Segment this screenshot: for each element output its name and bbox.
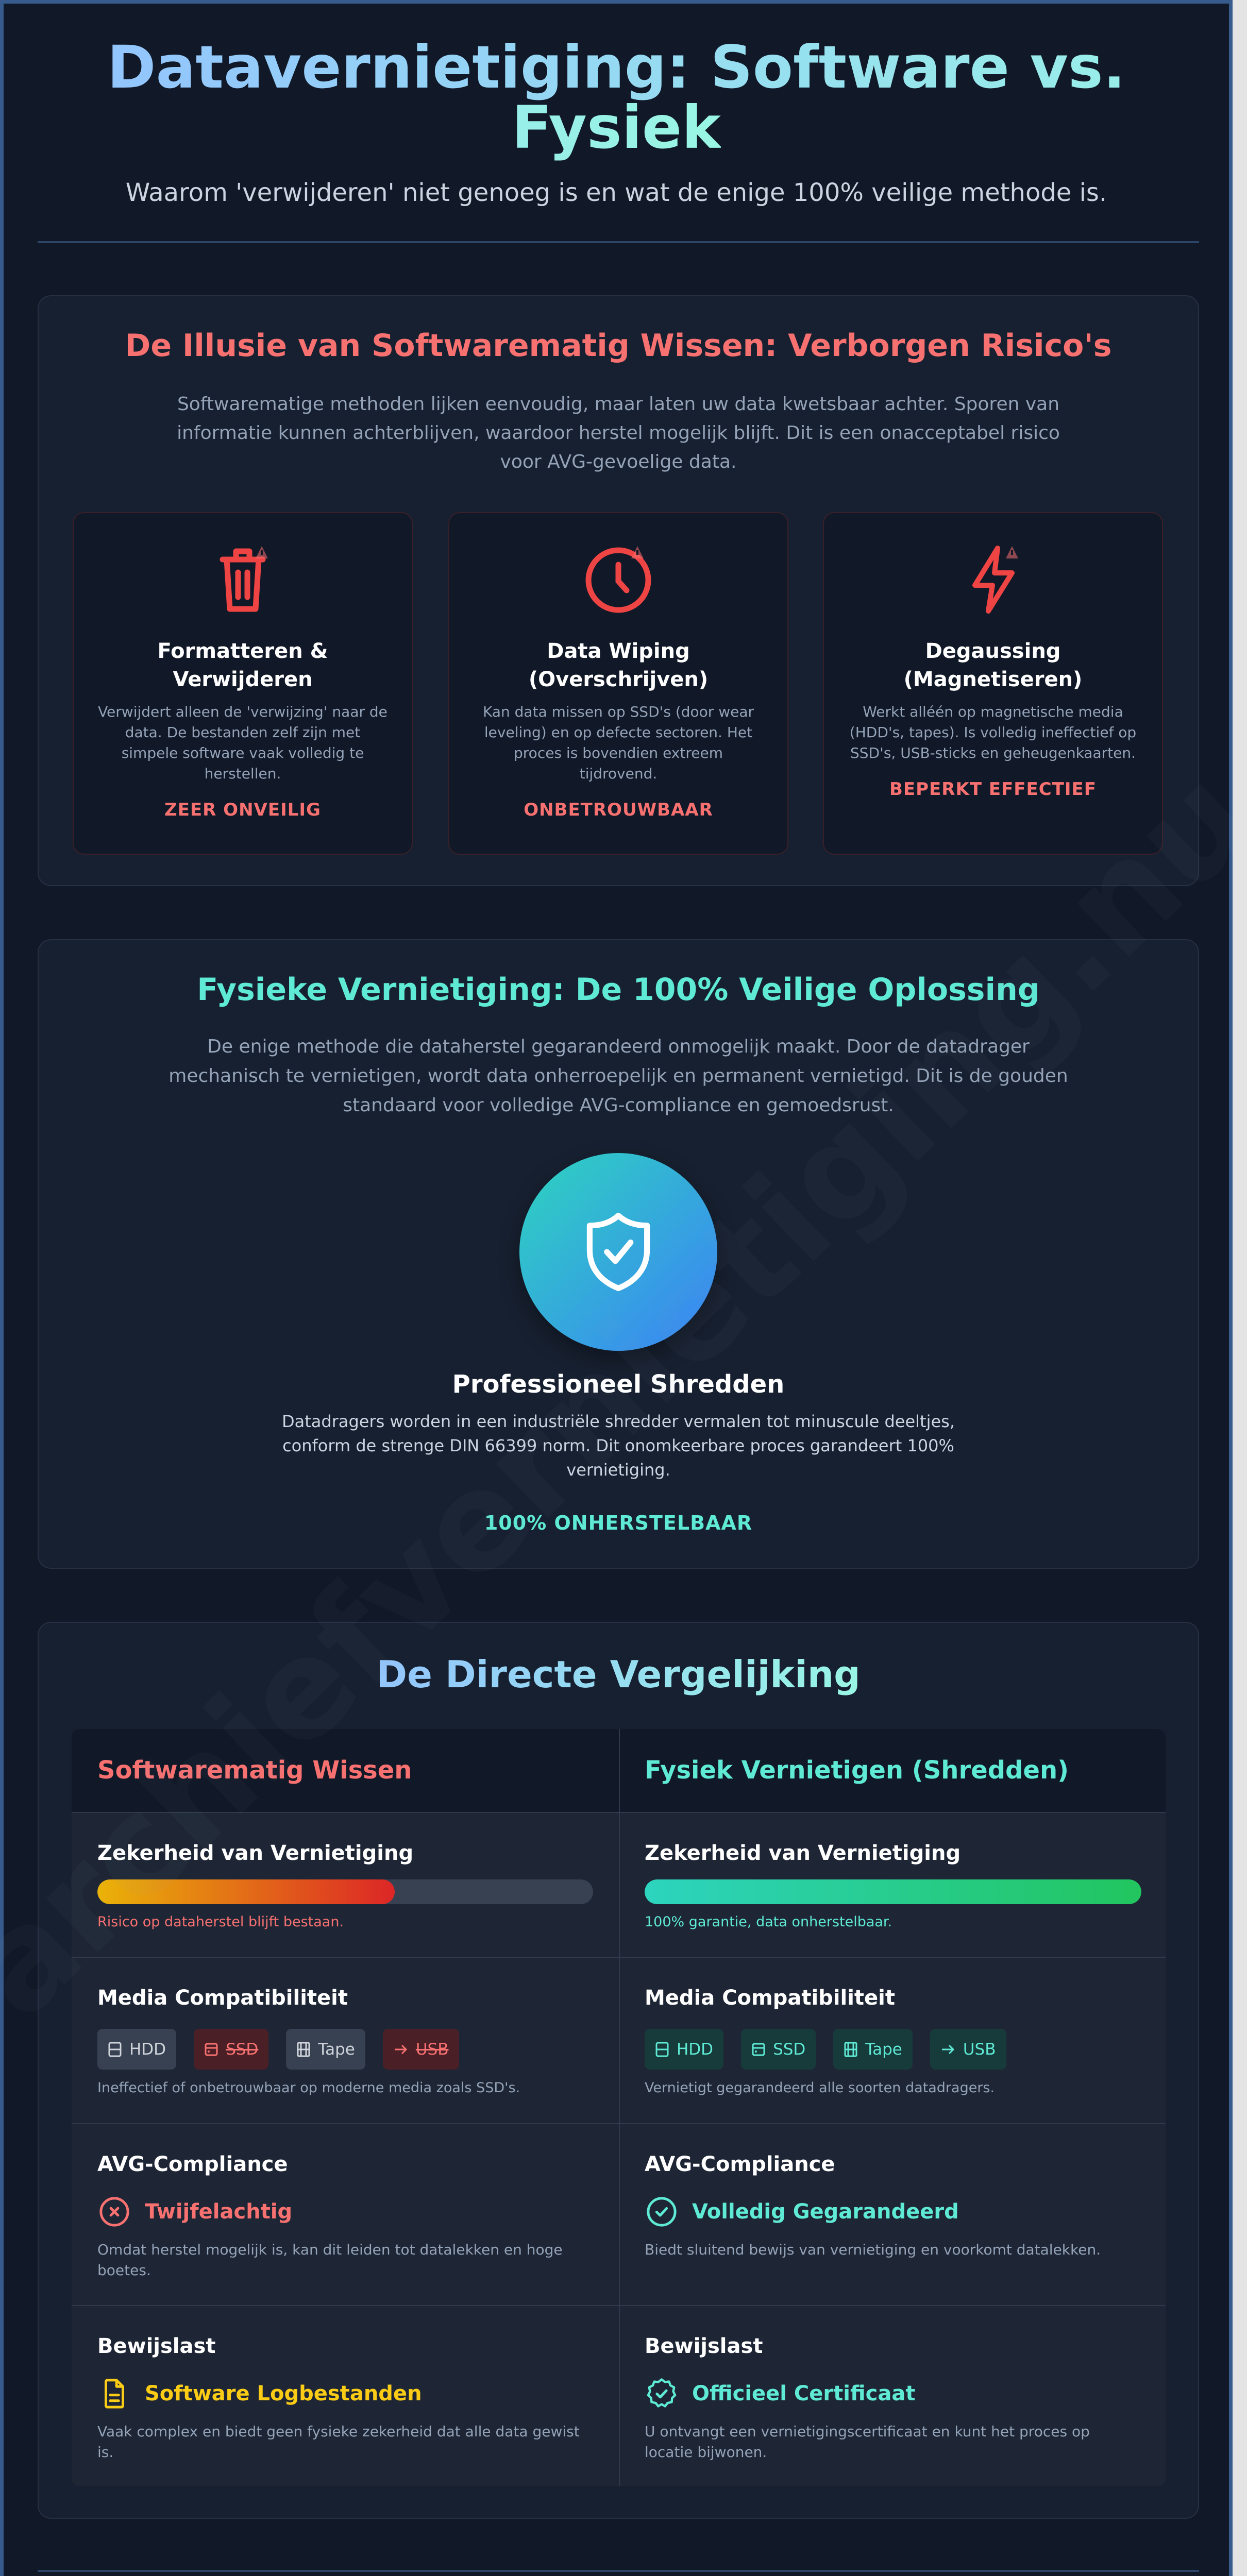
card: data wiping: Data Wiping	[547, 639, 690, 663]
row: AVG	[72, 2123, 1166, 2305]
heading: software illusion: De Illusie van Softwarematig Wissen: Verborgen Risico's	[125, 328, 1111, 364]
method description: Datadragers worden in een industriële shredder vermalen tot minuscule deeltjes,	[282, 1412, 955, 1431]
intro text: De enige methode die dataherstel gegarandeerd onmogelijk maakt. Door de datadrager	[207, 1036, 1030, 1057]
card: data wiping: (Overschrijven)	[529, 668, 708, 691]
bar: physical	[645, 1879, 1141, 1904]
row: media: Media Compatibiliteit	[97, 1986, 348, 2010]
row: zekerheid: 100% garantie, data onherstelbaar.	[645, 1914, 892, 1930]
heading: comparison: De Directe Vergelijking	[376, 1653, 861, 1696]
chips: software: SSD	[226, 2040, 258, 2059]
status: gegarandeerd: Volledig Gegarandeerd	[692, 2200, 959, 2224]
intro text: mechanisch te vernietigen, wordt data onherroepelijk en permanent vernietigd. Dit is de gouden	[168, 1065, 1068, 1087]
row: bewijslast: Bewijslast	[645, 2334, 763, 2358]
method description: vernietiging.	[566, 1460, 670, 1480]
status: certificaat: Officieel Certificaat	[692, 2382, 915, 2405]
heading: physical: Fysieke Vernietiging: De 100% Veilige Oplossing	[197, 972, 1040, 1008]
row: AVG: Biedt sluitend bewijs van vernietiging en voorkomt datalekken.	[645, 2241, 1101, 2258]
method description: conform de strenge DIN 66399 norm. Dit onomkeerbare proces garandeert 100%	[282, 1436, 954, 1455]
card: data wiping	[448, 512, 788, 855]
chips: software: Tape	[318, 2040, 355, 2059]
card: data wiping: Kan data missen op SSD's (door wear	[483, 703, 754, 720]
status: logbestanden: Software Logbestanden	[145, 2382, 422, 2405]
intro text: standaard voor volledige AVG-compliance en gemoedsrust.	[343, 1095, 894, 1116]
row: media: Media Compatibiliteit	[645, 1986, 895, 2010]
row: bewijslast: Vaak complex en biedt geen fysieke zekerheid dat alle data gewist	[97, 2423, 580, 2440]
status: certificaat	[647, 2378, 915, 2408]
card: degaussing: (HDD's, tapes). Is volledig ineffectief op	[850, 724, 1136, 741]
panel: physical destruction	[38, 939, 1199, 1569]
chips: physical	[645, 2029, 1006, 2070]
chips: software	[97, 2029, 459, 2070]
icon: shield circle	[519, 1153, 717, 1351]
chips: software: HDD	[129, 2040, 166, 2059]
card: degaussing: SSD's, USB-sticks en geheugenkaarten.	[850, 744, 1136, 761]
card: formatteren: Formatteren &	[157, 639, 328, 663]
card: formatteren: Verwijdert alleen de 'verwijzing' naar de	[98, 703, 387, 720]
chips: physical: Tape	[865, 2040, 902, 2059]
row: bewijslast: U ontvangt een vernietigingscertificaat en kunt het proces op	[645, 2423, 1090, 2440]
intro text: informatie kunnen achterblijven, waardoor herstel mogelijk blijft. Dit is een onacceptabel risico	[177, 422, 1060, 444]
intro text: voor AVG-gevoelige data.	[500, 451, 736, 472]
intro text: Softwarematige methoden lijken eenvoudig, maar laten uw data kwetsbaar achter. Sporen van	[177, 394, 1059, 415]
card: formatteren	[73, 512, 413, 855]
row: zekerheid: Risico op dataherstel blijft bestaan.	[97, 1914, 344, 1930]
bar: software	[97, 1879, 593, 1904]
row: media	[72, 1957, 1166, 2123]
icon: trash	[220, 546, 268, 612]
card: formatteren: simpele software vaak volledig te	[122, 744, 364, 761]
status: logbestanden	[105, 2379, 422, 2409]
row: AVG: AVG-Compliance	[645, 2153, 835, 2176]
title: Datavernietiging: Software vs.	[107, 33, 1125, 101]
row: bewijslast: is.	[97, 2444, 113, 2461]
row: AVG: Omdat herstel mogelijk is, kan dit leiden tot datalekken en hoge	[97, 2241, 563, 2258]
card: degaussing: Werkt alléén op magnetische media	[863, 703, 1123, 720]
panel: comparison	[38, 1622, 1199, 2519]
chips: software: USB	[416, 2040, 448, 2059]
card: degaussing: Degaussing	[925, 639, 1060, 663]
card: formatteren: ZEER ONVEILIG	[164, 800, 321, 820]
row: AVG: AVG-Compliance	[97, 2153, 288, 2176]
table header: Fysiek Vernietigen (Shredden)	[645, 1756, 1069, 1785]
card: formatteren: herstellen.	[205, 765, 281, 782]
table header	[72, 1729, 1166, 1812]
row: zekerheid: Zekerheid van Vernietiging	[645, 1841, 960, 1865]
subtitle: Waarom 'verwijderen' niet genoeg is en wat de enige 100% veilige methode is.	[126, 178, 1107, 207]
panel: software risks	[38, 295, 1199, 886]
table header: Softwarematig Wissen	[97, 1756, 412, 1785]
card: data wiping: ONBETROUWBAAR	[524, 800, 713, 820]
card: degaussing	[823, 512, 1163, 855]
status: twijfelachtig: Twijfelachtig	[145, 2200, 292, 2224]
icon: lightning	[972, 546, 1018, 614]
row: zekerheid: Zekerheid van Vernietiging	[97, 1841, 413, 1865]
card: degaussing: BEPERKT EFFECTIEF	[889, 779, 1097, 800]
card: degaussing: (Magnetiseren)	[904, 668, 1082, 691]
row: bewijslast: Bewijslast	[97, 2334, 215, 2358]
row: zekerheid	[72, 1812, 1166, 1957]
title	[107, 33, 1125, 162]
status: twijfelachtig	[99, 2197, 292, 2227]
card: data wiping: proces is bovendien extreem	[514, 744, 723, 761]
row: bewijslast	[72, 2305, 1166, 2486]
row: media: Vernietigt gegarandeerd alle soorten datadragers.	[645, 2080, 995, 2096]
card: formatteren: data. De bestanden zelf zijn met	[125, 724, 360, 741]
chips: physical: SSD	[773, 2040, 805, 2059]
icon: clock	[585, 546, 651, 613]
row: AVG: boetes.	[97, 2262, 151, 2279]
title: Fysiek	[512, 93, 721, 162]
status label: 100% ONHERSTELBAAR	[484, 1512, 752, 1534]
method title: Professioneel Shredden	[452, 1370, 784, 1399]
method description	[282, 1412, 955, 1480]
row: bewijslast: locatie bijwonen.	[645, 2444, 767, 2461]
card: data wiping: tijdrovend.	[580, 765, 657, 782]
row: media: Ineffectief of onbetrouwbaar op moderne media zoals SSD's.	[97, 2080, 520, 2096]
chips: physical: HDD	[677, 2040, 713, 2059]
card: formatteren: Verwijderen	[173, 668, 313, 691]
comparison table	[72, 1729, 1166, 2486]
intro text	[177, 394, 1060, 472]
intro text	[168, 1036, 1068, 1116]
chips: physical: USB	[963, 2040, 996, 2059]
status: gegarandeerd	[647, 2197, 959, 2227]
card: data wiping: leveling) en op defecte sectoren. Het	[484, 724, 752, 741]
